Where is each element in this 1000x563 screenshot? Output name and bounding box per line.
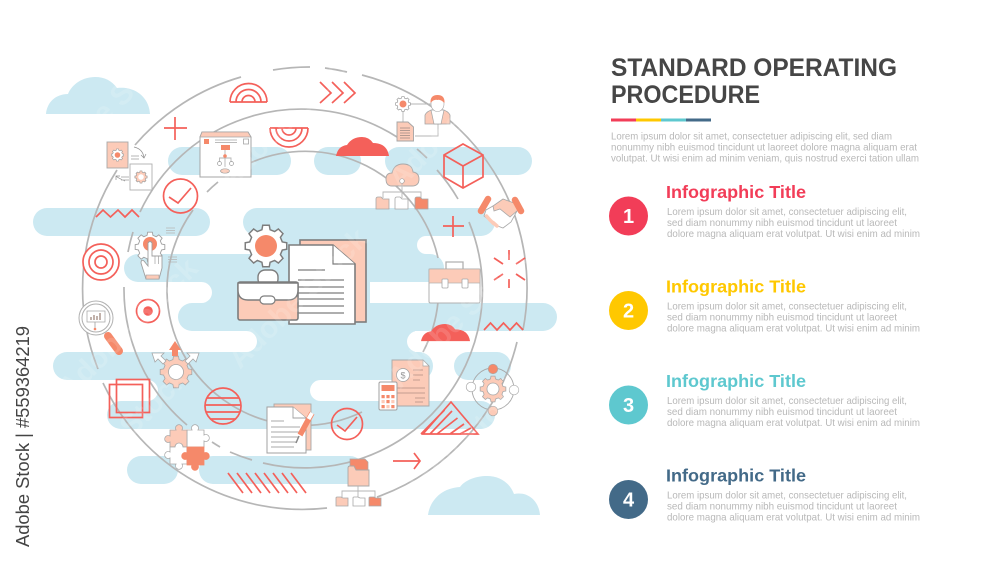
item 3: Infographic Title — [666, 371, 806, 391]
item 3: 3 — [623, 395, 634, 417]
watermark text: Adobe Stock — [52, 252, 205, 405]
icon: upper check circle — [164, 179, 198, 213]
icon: flowchart window — [200, 132, 251, 177]
item 1: dolore magna aliquam erat volutpat. Ut wisi enim ad minim — [667, 228, 920, 240]
watermark text: Adobe Stock — [32, 32, 185, 185]
icon: gear with arrows — [152, 341, 199, 388]
item 4: Infographic Title — [666, 466, 806, 486]
watermark text: Adobe Stock — [382, 372, 535, 525]
item 2: dolore magna aliquam erat volutpat. Ut wisi enim ad minim — [667, 322, 920, 334]
title: PROCEDURE — [611, 81, 760, 109]
title underline — [611, 118, 711, 122]
icon: left zigzag — [96, 210, 139, 217]
icon: overlapping squares — [110, 380, 150, 418]
intro paragraph: volutpat. Ut wisi enim ad minim veniam, quis nostrud exerci tation ullam — [611, 152, 919, 164]
icon: burst — [494, 250, 525, 288]
icon: red cloud lower — [421, 324, 470, 341]
stock id vertical text: Adobe Stock | #559364219 — [13, 326, 33, 547]
icon: arrow right — [393, 453, 420, 469]
icon: hand on gear — [135, 228, 177, 279]
watermark text: Adobe Stock — [382, 42, 535, 195]
intro paragraph: Lorem ipsum dolor sit amet, consectetuer adipiscing elit, sed diam — [611, 130, 892, 142]
item 2 — [609, 276, 920, 334]
title: STANDARD OPERATING — [611, 54, 897, 82]
icon: document and pen — [267, 404, 312, 453]
item 2: sed diam nonummy nibh euismod tincidunt ut laoreet — [667, 312, 897, 324]
watermark text: Adobe Stock — [382, 242, 535, 395]
icon: half rainbow arcs — [230, 84, 267, 102]
icon: magnifier with chart — [79, 301, 119, 351]
icon: invoice and calculator — [379, 360, 429, 410]
item 4 — [609, 466, 920, 524]
background pills and clouds — [33, 77, 557, 515]
icon: lower check circle — [332, 408, 362, 440]
item 4: Lorem ipsum dolor sit amet, consectetuer adipiscing elit, — [667, 490, 907, 502]
intro paragraph — [611, 130, 919, 164]
icon: handshake — [481, 199, 521, 228]
concentric dashed rings — [83, 67, 527, 509]
item 2: 2 — [623, 300, 634, 322]
watermark text: Adobe Stock — [212, 42, 365, 195]
item 2: Infographic Title — [666, 276, 806, 296]
intro paragraph: nonummy nibh euismod tincidunt ut laoreet dolore magna aliquam erat — [611, 142, 917, 154]
icon: cloud with folders — [376, 164, 428, 209]
icon: half target — [270, 128, 308, 147]
icon: invoice and calculator: $ — [400, 370, 406, 380]
item 4: dolore magna aliquam erat volutpat. Ut wisi enim ad minim — [667, 512, 920, 524]
item 1: Infographic Title — [666, 182, 806, 202]
icon: documents with gears — [107, 142, 152, 190]
item 1: 1 — [623, 206, 634, 228]
icon: red cloud top — [336, 137, 389, 156]
icon: target — [83, 244, 119, 280]
icon: striped circle — [205, 388, 241, 424]
watermark text — [32, 32, 535, 525]
item 3: sed diam nonummy nibh euismod tincidunt ut laoreet — [667, 406, 897, 418]
item 1 — [609, 182, 920, 240]
icon: hatch lines — [228, 473, 306, 493]
icon: folder tree — [336, 459, 381, 506]
item 3: dolore magna aliquam erat volutpat. Ut wisi enim ad minim — [667, 417, 920, 429]
icon: hatched triangle — [421, 402, 478, 434]
icon: right zigzag — [484, 323, 523, 330]
icon: plus — [164, 117, 187, 140]
item 2: Lorem ipsum dolor sit amet, consectetuer adipiscing elit, — [667, 300, 907, 312]
watermark text: Adobe Stock — [222, 222, 375, 375]
title — [611, 54, 897, 109]
item 3 — [609, 371, 920, 429]
icon: person with gear and document — [396, 95, 450, 141]
icon: central documents, gear and briefcase — [238, 225, 366, 324]
item 4: sed diam nonummy nibh euismod tincidunt ut laoreet — [667, 500, 897, 512]
watermark text: Adobe Stock — [42, 362, 195, 515]
item 4: 4 — [623, 490, 635, 512]
icon: cube — [444, 144, 483, 188]
icon: small target — [136, 300, 160, 322]
icon: briefcase — [429, 262, 480, 303]
icon: small plus — [443, 216, 464, 237]
icon: chevrons — [320, 82, 355, 103]
icon: gear cycle — [466, 364, 519, 416]
item 1: Lorem ipsum dolor sit amet, consectetuer adipiscing elit, — [667, 206, 907, 218]
item 3: Lorem ipsum dolor sit amet, consectetuer adipiscing elit, — [667, 395, 907, 407]
item 1: sed diam nonummy nibh euismod tincidunt ut laoreet — [667, 217, 897, 229]
icon: puzzle — [165, 425, 209, 470]
